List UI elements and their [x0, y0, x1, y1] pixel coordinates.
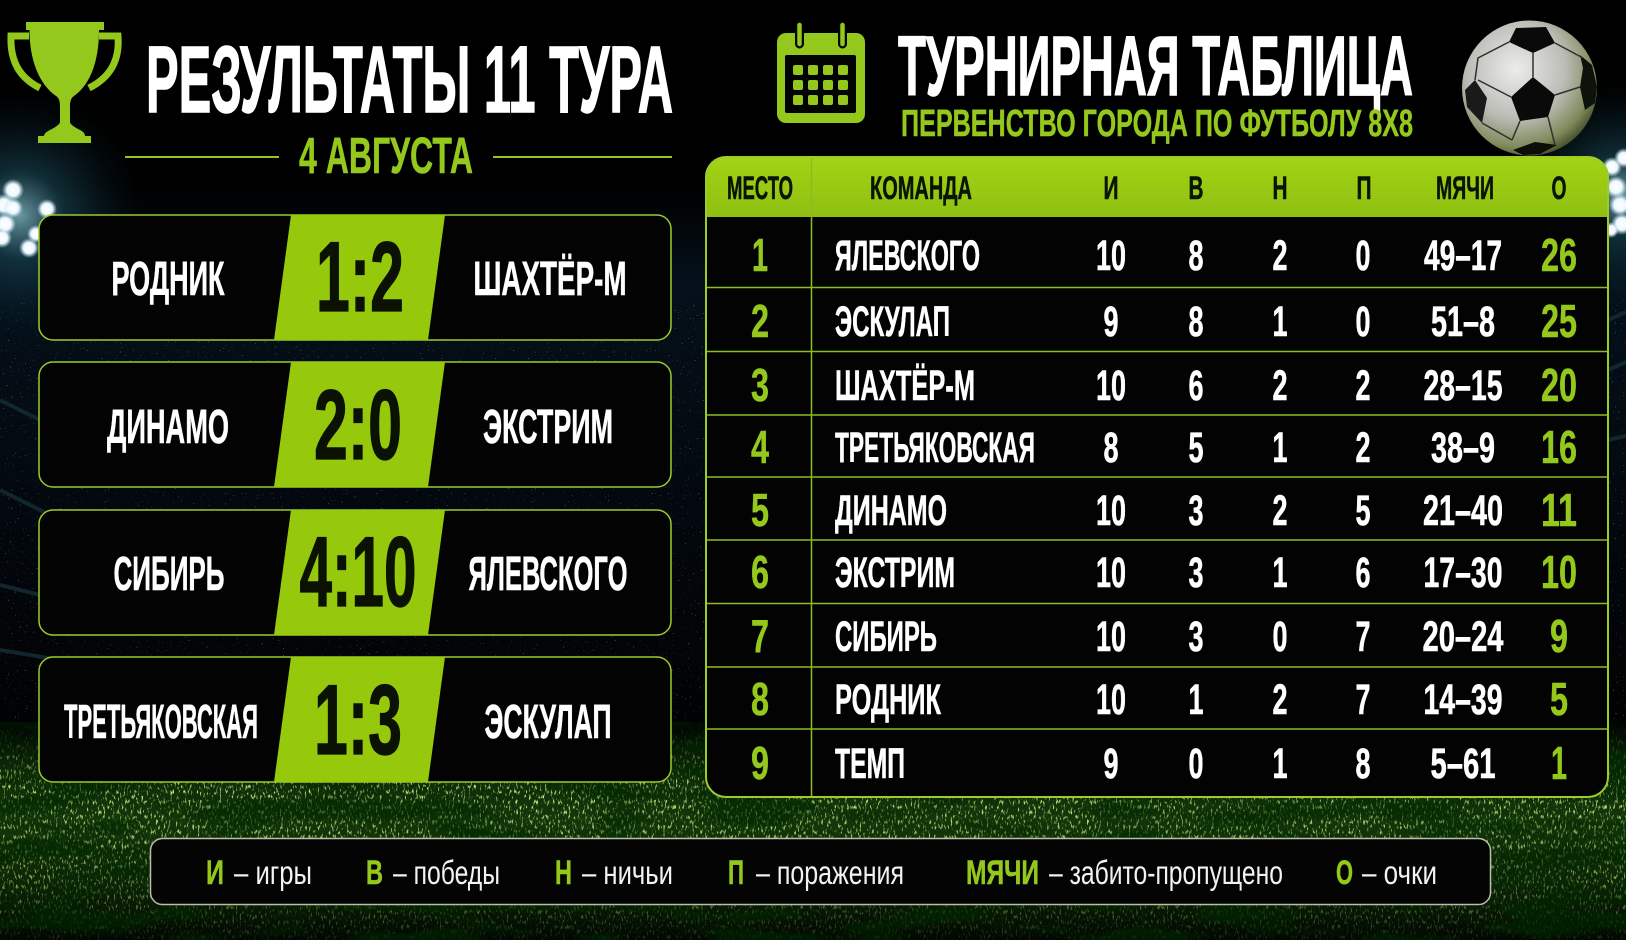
- row 9: 9: [1104, 740, 1118, 788]
- row 2: 0: [1356, 298, 1370, 346]
- row 7: 10: [1096, 613, 1126, 661]
- legend: И: [206, 854, 224, 892]
- legend: – победы: [393, 854, 500, 891]
- match 3: СИБИРЬ: [114, 548, 224, 601]
- legend: В: [366, 854, 383, 892]
- row 2: 8: [1188, 298, 1204, 346]
- table header: О: [1552, 170, 1566, 206]
- row 3: 6: [1188, 362, 1204, 410]
- row 8: 7: [1356, 676, 1370, 724]
- row 8: 8: [751, 673, 769, 725]
- row 1: ЯЛЕВСКОГО: [835, 232, 980, 280]
- row 4: [751, 421, 1577, 473]
- row 9: ТЕМП: [835, 740, 905, 788]
- row 9: 0: [1188, 740, 1204, 788]
- row 7: 3: [1188, 613, 1204, 661]
- row 3: 3: [751, 359, 769, 411]
- row 2: 51–8: [1431, 298, 1495, 346]
- match 4: 1:3: [314, 664, 402, 775]
- row 8: [751, 673, 1568, 725]
- row 5: 5: [751, 484, 769, 536]
- icon: trophy: [11, 22, 118, 143]
- date heading: 4 АВГУСТА: [299, 127, 473, 184]
- row 5: 2: [1272, 487, 1288, 535]
- row 2: 2: [751, 295, 769, 347]
- legend: П: [728, 854, 744, 892]
- row 9: 5–61: [1430, 740, 1496, 788]
- row 1: 49–17: [1424, 232, 1502, 280]
- row 9: 1: [1551, 737, 1567, 789]
- match 1: РОДНИК: [112, 253, 225, 306]
- grass field: [0, 722, 1626, 940]
- row 5: 5: [1356, 487, 1370, 535]
- table header: [706, 157, 1608, 217]
- match 1: ШАХТЁР-М: [474, 253, 626, 306]
- row 1: 0: [1356, 232, 1370, 280]
- row 1: 1: [752, 229, 768, 281]
- match 3: [39, 510, 671, 635]
- icon: calendar: [777, 25, 865, 123]
- row 2: ЭСКУЛАП: [835, 298, 950, 346]
- match 3: 4:10: [300, 516, 416, 627]
- row 3: 2: [1356, 362, 1370, 410]
- row 2: 25: [1541, 295, 1577, 347]
- legend: Н: [555, 854, 572, 892]
- table header: П: [1356, 170, 1372, 206]
- match 2: [39, 362, 671, 487]
- row 8: 5: [1550, 673, 1568, 725]
- row 5: ДИНАМО: [835, 487, 947, 535]
- match 4: [39, 657, 671, 782]
- row 6: ЭКСТРИМ: [835, 549, 955, 597]
- row 8: 1: [1188, 676, 1204, 724]
- row 3: 10: [1096, 362, 1126, 410]
- row 4: 16: [1541, 421, 1577, 473]
- row 3: ШАХТЁР-М: [835, 362, 975, 410]
- match 1: [39, 215, 671, 340]
- row 5: 10: [1096, 487, 1126, 535]
- row 1: [752, 229, 1577, 281]
- legend: – поражения: [756, 854, 904, 891]
- row 5: 3: [1188, 487, 1204, 535]
- table header: МЯЧИ: [1436, 170, 1494, 206]
- match 2: 2:0: [314, 369, 402, 480]
- row 8: 14–39: [1424, 676, 1502, 724]
- icon: soccer ball: [1462, 20, 1597, 156]
- table header: Н: [1272, 170, 1288, 206]
- row 6: 10: [1541, 546, 1577, 598]
- row 4: 1: [1272, 424, 1288, 472]
- row 3: 28–15: [1424, 362, 1502, 410]
- row 7: 7: [751, 610, 769, 662]
- row 3: 20: [1541, 359, 1577, 411]
- row 6: 6: [1356, 549, 1370, 597]
- row 6: 10: [1096, 549, 1126, 597]
- row 7: 20–24: [1422, 613, 1504, 661]
- row 8: 2: [1272, 676, 1288, 724]
- row 6: 17–30: [1424, 549, 1502, 597]
- row 1: 26: [1541, 229, 1577, 281]
- row 2: 9: [1104, 298, 1118, 346]
- row 6: 3: [1188, 549, 1204, 597]
- row 5: [751, 484, 1577, 536]
- legend: – ничьи: [582, 854, 673, 891]
- match 4: ТРЕТЬЯКОВСКАЯ: [64, 696, 258, 749]
- row 7: 0: [1272, 613, 1288, 661]
- standings table: [706, 157, 1608, 797]
- legend: МЯЧИ: [966, 854, 1039, 892]
- legend: – очки: [1362, 854, 1437, 891]
- row 4: 8: [1104, 424, 1118, 472]
- match 1: 1:2: [316, 221, 404, 332]
- row 4: 38–9: [1431, 424, 1495, 472]
- row 2: [751, 295, 1577, 347]
- row 6: 6: [751, 546, 769, 598]
- row 8: 10: [1096, 676, 1126, 724]
- row 3: [751, 359, 1577, 411]
- table header: КОМАНДА: [870, 170, 972, 206]
- row 4: 5: [1188, 424, 1204, 472]
- table header: МЕСТО: [727, 170, 793, 206]
- row 4: 2: [1356, 424, 1370, 472]
- table header: В: [1188, 170, 1204, 206]
- row 3: 2: [1272, 362, 1288, 410]
- row 9: 1: [1272, 740, 1288, 788]
- row 9: 9: [751, 737, 769, 789]
- row 7: 7: [1356, 613, 1370, 661]
- row 9: 8: [1356, 740, 1370, 788]
- legend: – забито-пропущено: [1049, 854, 1283, 891]
- row 4: ТРЕТЬЯКОВСКАЯ: [835, 424, 1035, 472]
- legend: – игры: [234, 854, 312, 891]
- row 6: [751, 546, 1577, 598]
- match 3: ЯЛЕВСКОГО: [468, 548, 628, 601]
- row 9: [751, 737, 1567, 789]
- row 8: РОДНИК: [835, 676, 941, 724]
- row 7: 9: [1550, 610, 1568, 662]
- row 6: 1: [1272, 549, 1288, 597]
- row 2: 1: [1272, 298, 1288, 346]
- title: results: РЕЗУЛЬТАТЫ 11 ТУРА: [146, 27, 673, 133]
- row 1: 10: [1096, 232, 1126, 280]
- match 4: ЭСКУЛАП: [484, 696, 612, 749]
- match 2: ДИНАМО: [107, 401, 229, 454]
- table header: И: [1104, 170, 1118, 206]
- legend: [150, 838, 1490, 904]
- row 4: 4: [751, 421, 769, 473]
- row 1: 2: [1272, 232, 1288, 280]
- row 5: 11: [1541, 484, 1577, 536]
- row 7: СИБИРЬ: [835, 613, 937, 661]
- legend: О: [1336, 854, 1353, 892]
- row 7: [751, 610, 1568, 662]
- row 5: 21–40: [1423, 487, 1503, 535]
- match 2: ЭКСТРИМ: [483, 401, 613, 454]
- row 1: 8: [1188, 232, 1204, 280]
